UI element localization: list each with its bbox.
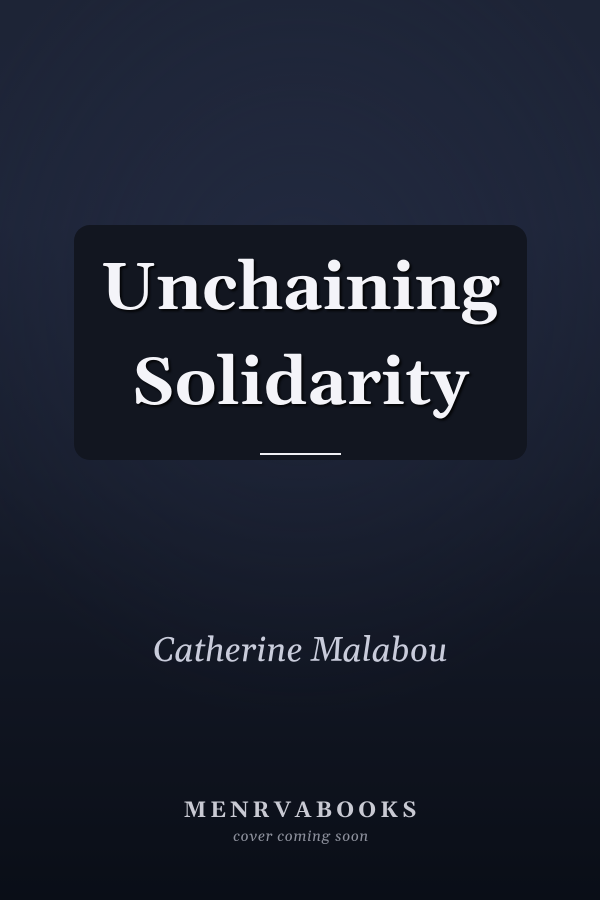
title xyxy=(101,247,502,427)
publisher: MENRVABOOKS xyxy=(184,797,420,825)
title underline xyxy=(260,453,341,455)
title: Unchaining xyxy=(101,247,499,332)
title: Solidarity xyxy=(132,342,468,427)
tagline: cover coming soon xyxy=(233,828,369,847)
author: Catherine Malabou xyxy=(152,629,448,673)
title panel xyxy=(74,225,527,460)
